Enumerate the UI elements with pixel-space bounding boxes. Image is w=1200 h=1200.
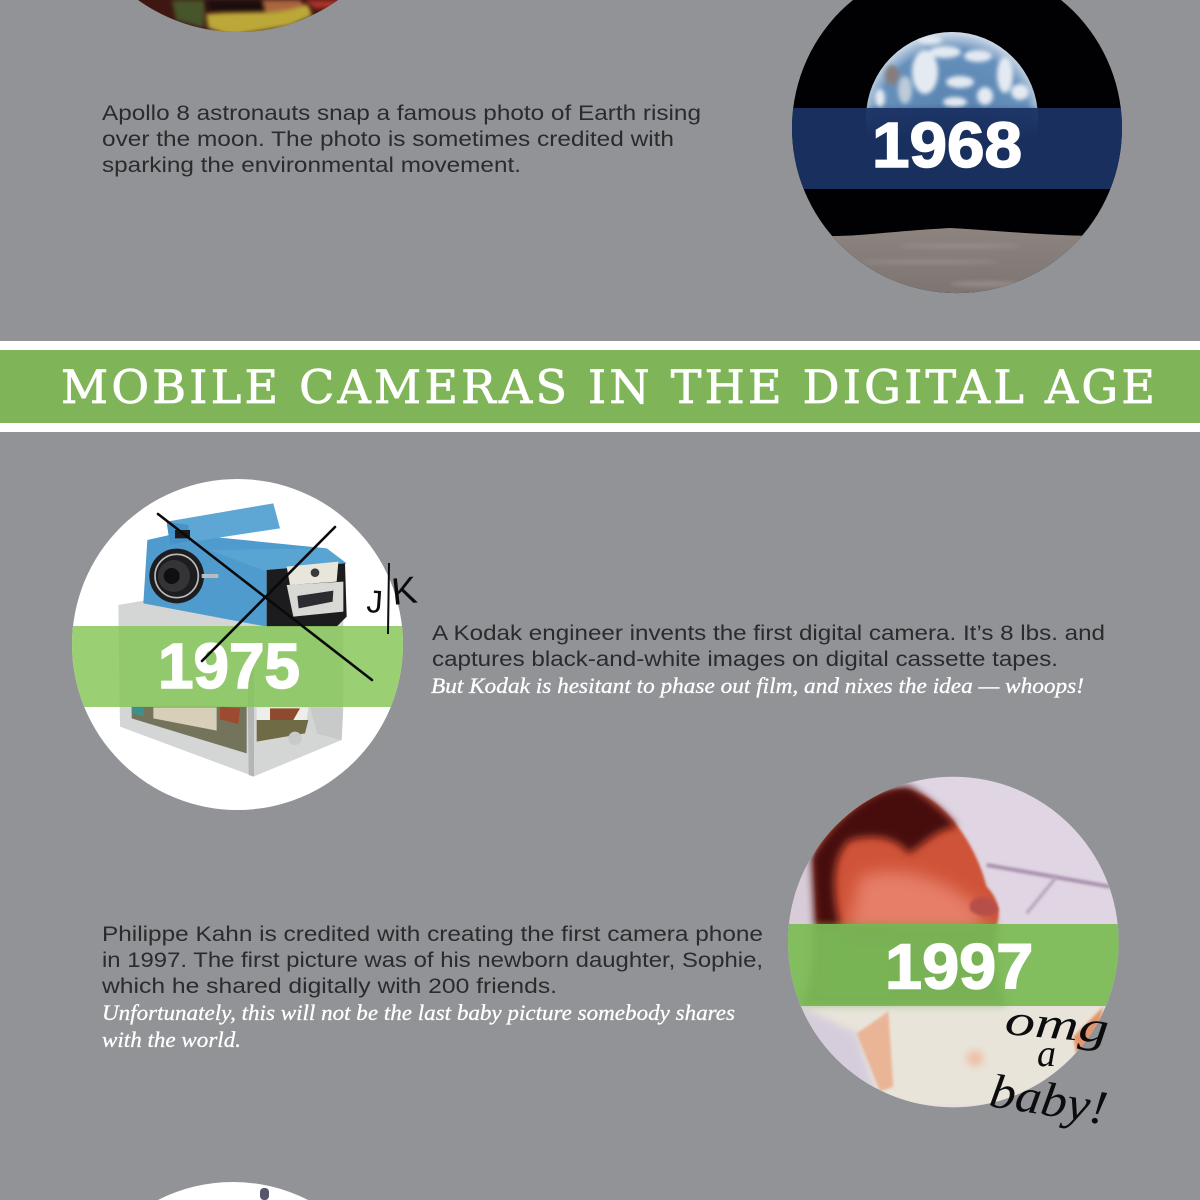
- icon: Kodak camera: [118, 503, 347, 777]
- cassette: [267, 563, 347, 627]
- handwritten note: omg a baby: omg: [1003, 995, 1111, 1053]
- text block: 1968 Apollo 8: over the moon. The photo is sometimes credited with: [102, 128, 674, 151]
- year label: 1968: [872, 109, 1022, 181]
- handwritten note: omg a baby: baby!: [986, 1065, 1111, 1135]
- text block: 1968 Apollo 8: [102, 102, 701, 177]
- icon: earth: [866, 32, 1038, 116]
- photo circle: 1975 digital camera: [72, 479, 404, 810]
- script aside: But Kodak is hesitant to phase out film, and nixes the idea — whoops!: [431, 673, 1084, 698]
- year band: [792, 108, 1123, 189]
- camera body: [143, 533, 347, 627]
- text block: 1968 Apollo 8: sparking the environmental movement.: [102, 154, 521, 177]
- handwritten note: omg a baby: a: [1037, 1033, 1056, 1075]
- handwritten note: omg a baby: [986, 995, 1111, 1135]
- moon surface: [832, 228, 1082, 293]
- year band: [72, 626, 404, 707]
- chassis: [118, 601, 343, 777]
- text block: 1968 Apollo 8: Apollo 8 astronauts snap a famous photo of Earth rising: [102, 102, 701, 125]
- text block: 1997 Philippe Kahn: [101, 923, 763, 1052]
- handwritten note: JK: [366, 563, 419, 634]
- handwritten note: JK: J: [366, 583, 384, 620]
- text block: 1975 Kodak: captures black-and-white images on digital cassette tapes.: [432, 648, 1058, 671]
- lens: [149, 549, 204, 603]
- text block: 1975 Kodak: [431, 622, 1105, 698]
- script aside: with the world.: [102, 1027, 241, 1052]
- crossed out scribble: [158, 514, 372, 680]
- fade of earth into the dark: [866, 106, 1038, 142]
- baby head: [813, 789, 999, 930]
- script aside: Unfortunately, this will not be the last baby picture somebody shares: [102, 1000, 735, 1025]
- year label: 1997: [885, 930, 1033, 1002]
- photo circle: food at top, cropped: [138, 0, 338, 32]
- photo circle: 1968 earthrise: [792, 0, 1123, 296]
- banner heading: MOBILE CAMERAS IN THE DIGITAL AGE: [61, 360, 1155, 414]
- baby hair: [812, 786, 957, 927]
- text block: 1997 Philippe Kahn: Philippe Kahn is credited with creating the first camera phone: [102, 923, 763, 946]
- script aside: [102, 1000, 735, 1052]
- text block: 1997 Philippe Kahn: in 1997. The first picture was of his newborn daughter, Sophie,: [102, 949, 763, 972]
- year label: 1975: [158, 630, 300, 702]
- text block: 1997 Philippe Kahn: which he shared digitally with 200 friends.: [101, 975, 557, 998]
- baby arm: [857, 1012, 893, 1092]
- section banner: [0, 341, 1200, 432]
- handwritten note: JK: K: [390, 570, 419, 614]
- photo circle: next entry, cropped at bottom: [158, 1182, 308, 1200]
- year band: [788, 924, 1119, 1006]
- blanket: [788, 1003, 1119, 1107]
- text block: 1975 Kodak: A Kodak engineer invents the first digital camera. It’s 8 lbs. and: [432, 622, 1105, 645]
- photo circle: 1997 newborn baby: [788, 777, 1119, 1107]
